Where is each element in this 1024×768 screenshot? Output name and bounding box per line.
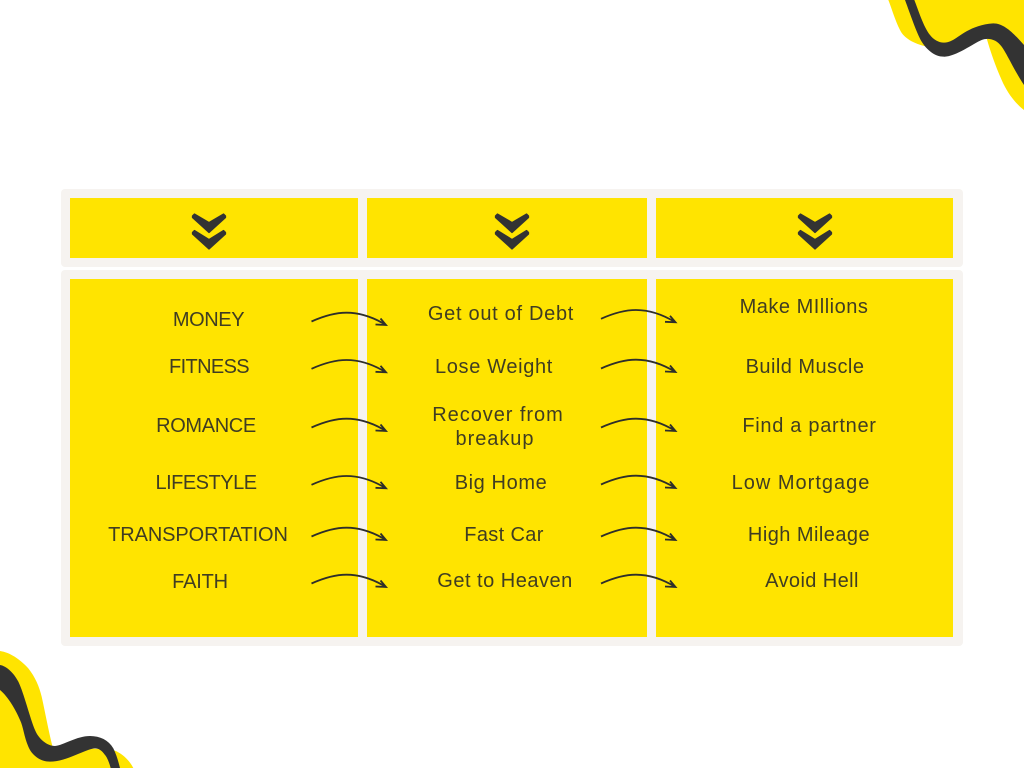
icon: double chevron 2: [494, 213, 530, 250]
icon: double chevron 1: [192, 213, 226, 250]
arrow row 2: [312, 360, 386, 372]
label: MONEY: MONEY: [173, 309, 244, 331]
arrow row 5 b: [601, 528, 676, 540]
label: FAITH: FAITH: [172, 571, 228, 593]
arrow row 3 b: [601, 419, 676, 431]
arrow row 2 b: [601, 360, 676, 372]
body column 3: [656, 279, 953, 637]
text: Avoid Hell: Avoid Hell: [765, 570, 859, 592]
arrow row 4 b: [601, 476, 676, 488]
header panel: [61, 189, 963, 267]
header cell 3: [656, 198, 953, 258]
arrow row 4: [312, 476, 386, 488]
body column 1: [70, 279, 358, 637]
decoration: bottom left wave: [0, 651, 134, 768]
text: High Mileage: High Mileage: [748, 524, 870, 546]
text: Find a partner: Find a partner: [742, 415, 877, 437]
arrow row 6 b: [601, 575, 676, 587]
label: LIFESTYLE: LIFESTYLE: [155, 472, 257, 494]
arrow row 5: [312, 528, 386, 540]
text: Get to Heaven: Get to Heaven: [437, 570, 573, 592]
text: Low Mortgage: Low Mortgage: [732, 472, 870, 494]
text: Build Muscle: Build Muscle: [746, 356, 864, 378]
body column 2: [367, 279, 647, 637]
icon: double chevron 3: [798, 213, 832, 250]
text: Recover from breakup: Recover from: [432, 404, 564, 426]
decoration: top right wave: [888, 0, 1024, 110]
label: TRANSPORTATION: TRANSPORTATION: [108, 524, 288, 546]
arrow row 3: [312, 419, 386, 431]
text: Recover from breakup: breakup: [456, 428, 534, 450]
text: Recover from breakup: [432, 404, 564, 450]
arrow row 6: [312, 575, 386, 587]
header cell 2: [367, 198, 647, 258]
header cell 1: [70, 198, 358, 258]
text: Make MIllions: Make MIllions: [740, 296, 868, 318]
arrow row 1 b: [601, 310, 676, 322]
arrow row 1: [312, 313, 386, 325]
body panel: [61, 270, 963, 646]
text: Lose Weight: Lose Weight: [435, 356, 553, 378]
text: Fast Car: Fast Car: [464, 524, 544, 546]
text: Get out of Debt: Get out of Debt: [428, 303, 574, 325]
text: Big Home: Big Home: [455, 472, 547, 494]
label: ROMANCE: ROMANCE: [156, 415, 256, 437]
label: FITNESS: FITNESS: [169, 356, 249, 378]
